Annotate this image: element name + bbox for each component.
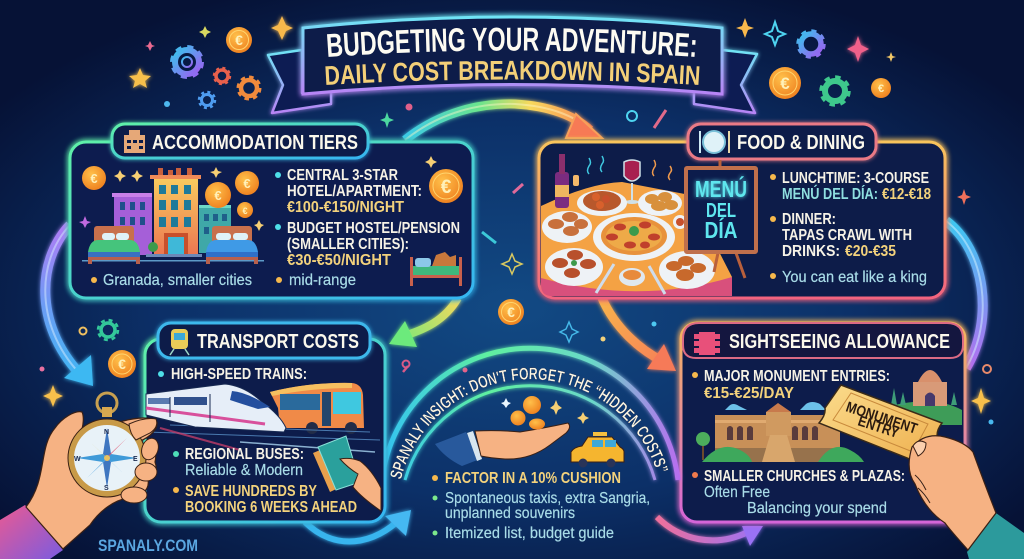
panel frame bbox=[145, 339, 385, 522]
ticket: monument entry: ENTRY bbox=[856, 413, 901, 442]
coin: top right large: € bbox=[780, 74, 790, 93]
panel frame bbox=[70, 142, 473, 298]
icon: hand with booklet bbox=[313, 436, 381, 511]
banner tails bbox=[268, 50, 757, 113]
title line 2: DAILY COST BREAKDOWN IN SPAIN bbox=[325, 60, 700, 85]
menu board: DEL bbox=[706, 200, 736, 222]
star: pink bbox=[847, 36, 869, 62]
icon: hand with coins bbox=[435, 396, 589, 466]
compass letters: S bbox=[104, 485, 109, 492]
compass letters: N bbox=[104, 429, 109, 436]
arrow: accommodation to compass bbox=[45, 225, 93, 386]
text: save hundreds: BOOKING 6 WEEKS AHEAD bbox=[185, 499, 357, 516]
text: budget hostel: BUDGET HOSTEL/PENSION bbox=[287, 220, 460, 237]
text: balancing: Balancing your spend bbox=[747, 500, 887, 517]
coin: lower left: € bbox=[118, 356, 126, 372]
gear: orange bbox=[238, 77, 260, 99]
compass rose bbox=[77, 428, 137, 488]
compass letters: E bbox=[133, 456, 138, 463]
website label: SPANALY.COM bbox=[98, 536, 198, 555]
star: five point bbox=[129, 68, 151, 88]
text: lunchtime bbox=[770, 170, 931, 203]
star: green mid bbox=[380, 112, 394, 128]
gear: small blue bbox=[199, 92, 215, 108]
compass case bbox=[68, 419, 146, 497]
coin: center bbox=[498, 299, 524, 325]
illustration: castle and dome bbox=[696, 370, 962, 462]
text: central hotel: HOTEL/APARTMENT: bbox=[287, 183, 422, 200]
star: outline center bottom bbox=[560, 322, 578, 342]
title line 1: BUDGETING YOUR ADVENTURE: bbox=[327, 28, 696, 57]
hand bbox=[909, 436, 996, 550]
gear: red bbox=[214, 68, 230, 84]
banner body bbox=[303, 17, 722, 94]
gear: right purple bbox=[798, 31, 824, 57]
icon: building bbox=[124, 130, 145, 153]
text: spontaneous: Spontaneous taxis, extra Sangria, bbox=[445, 490, 650, 507]
compass in hand bbox=[0, 393, 161, 559]
panel: food and dining bbox=[539, 124, 945, 298]
star: center bbox=[502, 254, 522, 274]
text: major monuments bbox=[692, 368, 890, 402]
coin large: € bbox=[441, 177, 452, 198]
coin: top right large bbox=[769, 67, 801, 99]
heading tab bbox=[688, 124, 876, 159]
arrow: food to sightseeing loop bbox=[946, 221, 983, 368]
decorations: gears coins stars bbox=[40, 16, 994, 424]
gear: right green bbox=[821, 77, 849, 105]
menu board: DÍA bbox=[704, 216, 738, 243]
coin: top left bbox=[226, 27, 252, 53]
dots and rings bbox=[40, 101, 994, 424]
compass face bbox=[74, 425, 140, 491]
arrow: insight to sightseeing bbox=[657, 517, 763, 546]
text: regional buses: REGIONAL BUSES: bbox=[185, 446, 304, 463]
arrow: transport to insight bbox=[305, 510, 411, 541]
illustration: train bbox=[146, 384, 286, 432]
coin: top right small: € bbox=[878, 83, 884, 95]
text: eat like a king: You can eat like a king bbox=[782, 269, 927, 286]
panel frame bbox=[539, 142, 945, 298]
text: dinner: €20-€35 bbox=[845, 243, 896, 260]
icon: plate and cutlery bbox=[699, 131, 730, 153]
fingers bbox=[121, 419, 161, 503]
heading tab bbox=[112, 124, 368, 158]
text: lunchtime: €12-€18 bbox=[882, 186, 931, 203]
text: central hotel: CENTRAL 3-STAR bbox=[287, 167, 398, 184]
coin bbox=[205, 182, 231, 208]
text: smaller churches: SMALLER CHURCHES & PLAZAS: bbox=[704, 468, 905, 485]
text: dinner: DRINKS: bbox=[782, 243, 840, 260]
icon: ticket bbox=[694, 332, 720, 355]
text: granada: Granada, smaller cities bbox=[103, 272, 252, 289]
heading tab bbox=[683, 323, 963, 358]
star: small bbox=[886, 52, 896, 62]
sleeve bbox=[0, 505, 63, 559]
illustration: table with tapas bbox=[541, 154, 745, 296]
text: itemized: Itemized list, budget guide bbox=[445, 525, 614, 542]
illustration: hotel and beds bbox=[82, 168, 264, 264]
hand holding ticket bbox=[909, 436, 1024, 559]
gear: lower left green bbox=[98, 320, 118, 340]
coin: € bbox=[90, 171, 98, 186]
star: lower left bbox=[43, 385, 63, 407]
text: central hotel: €100-€150/NIGHT bbox=[287, 199, 404, 216]
coin: top right small bbox=[871, 78, 891, 98]
heading: SIGHTSEEING ALLOWANCE bbox=[729, 331, 950, 353]
arrow: accommodation to food bbox=[405, 104, 602, 140]
panel: transport costs bbox=[145, 323, 385, 522]
icon: small bed bbox=[410, 252, 462, 286]
text: save hundreds bbox=[173, 483, 357, 516]
coin: € bbox=[214, 188, 222, 203]
coin: center: € bbox=[507, 304, 515, 320]
text: lunchtime: MENÚ DEL DÍA: bbox=[782, 184, 878, 203]
heading: TRANSPORT COSTS bbox=[197, 331, 359, 353]
text: smaller churches bbox=[692, 468, 905, 501]
star: yellow left bbox=[199, 26, 211, 38]
heading tab bbox=[158, 323, 370, 358]
text: budget hostel bbox=[275, 220, 460, 269]
text: budget hostel: (SMALLER CITIES): bbox=[287, 236, 409, 253]
star: gold left bbox=[271, 16, 293, 40]
icon: taxi bbox=[571, 432, 624, 468]
illustration: bus bbox=[146, 383, 380, 452]
coin: lower left bbox=[108, 350, 136, 378]
coin: € bbox=[243, 176, 251, 191]
text: spontaneous: unplanned souvenirs bbox=[445, 505, 575, 522]
menu board: MENÚ bbox=[695, 175, 747, 202]
text: regional buses bbox=[173, 446, 304, 479]
text: mid-range: mid-range bbox=[289, 272, 356, 289]
text: smaller churches: Often Free bbox=[704, 484, 770, 501]
thumb nail and finger lines bbox=[913, 441, 930, 503]
text: dinner: TAPAS CRAWL WITH bbox=[782, 227, 912, 244]
arc heading: SPANALY INSIGHT: DON'T FORGET THE “HIDDEN COSTS” bbox=[390, 367, 668, 479]
compass letters bbox=[74, 429, 138, 492]
ticket: monument entry: MONUMENT bbox=[844, 399, 919, 438]
compass letters: W bbox=[74, 456, 81, 463]
ticket: monument entry bbox=[819, 385, 942, 462]
icon: tram bbox=[170, 329, 189, 355]
arrow: food to sightseeing bbox=[602, 298, 676, 371]
text: spontaneous bbox=[432, 490, 650, 522]
star: right lower bbox=[971, 388, 991, 414]
arrow: accommodation to transport bbox=[389, 298, 458, 347]
sparkles bbox=[79, 156, 437, 231]
rainbow arcs bbox=[382, 348, 678, 480]
text: central hotel bbox=[275, 167, 422, 216]
text: cushion: FACTOR IN A 10% CUSHION bbox=[445, 470, 621, 487]
sleeve bbox=[967, 513, 1024, 559]
insight section bbox=[386, 342, 684, 542]
panel: sightseeing allowance bbox=[681, 323, 965, 522]
text: dinner bbox=[770, 211, 912, 260]
star: pink left bbox=[145, 41, 155, 51]
coin: top left: € bbox=[235, 32, 243, 48]
heading: ACCOMMODATION TIERS bbox=[152, 132, 358, 154]
title banner bbox=[264, 10, 761, 118]
text: budget hostel: €30-€50/NIGHT bbox=[287, 252, 391, 269]
star: pink right bbox=[957, 189, 971, 205]
coin bbox=[235, 171, 259, 195]
compass ring bbox=[97, 393, 117, 413]
coin large bbox=[429, 169, 463, 203]
coin bbox=[82, 166, 106, 190]
star: gold right bbox=[736, 18, 754, 38]
text: major monuments: €15-€25/DAY bbox=[704, 385, 794, 402]
text: lunchtime: LUNCHTIME: 3-COURSE bbox=[782, 170, 929, 187]
text: major monuments: MAJOR MONUMENT ENTRIES: bbox=[704, 368, 890, 385]
gear: blue purple bbox=[172, 47, 202, 77]
star: teal outline bbox=[765, 22, 785, 45]
text: dinner: DINNER: bbox=[782, 211, 836, 228]
text: regional buses: Reliable & Modern bbox=[185, 462, 303, 479]
panel frame bbox=[681, 323, 965, 522]
panel: accommodation tiers bbox=[70, 124, 473, 298]
hand bbox=[26, 412, 157, 549]
coin: € bbox=[242, 206, 248, 216]
text: high speed trains: HIGH-SPEED TRAINS: bbox=[171, 366, 307, 383]
coin bbox=[237, 202, 253, 218]
heading: FOOD & DINING bbox=[737, 132, 865, 154]
text: save hundreds: SAVE HUNDREDS BY bbox=[185, 483, 317, 500]
menu board bbox=[686, 168, 756, 252]
